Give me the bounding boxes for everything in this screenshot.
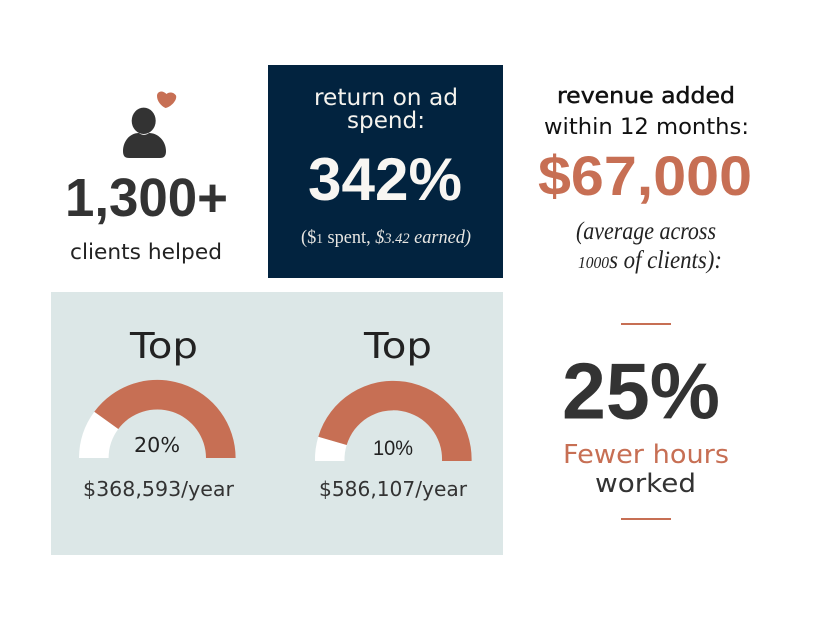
heading: return on ad spend: return on ad (314, 85, 458, 111)
gauge: top 10%: Top (363, 326, 432, 367)
panel: income gauges (51, 292, 503, 555)
gauge: top 20% (79, 326, 236, 501)
panel: revenue added: 1000s of clients): (578, 247, 722, 274)
panel: return on ad spend (268, 65, 503, 278)
gauge: top 10%: 10% (373, 437, 413, 460)
panel: revenue added: within 12 months: (544, 115, 749, 140)
panel: return on ad spend: spend: (347, 108, 425, 134)
note: average across clients: (average across (576, 218, 716, 245)
gauge: top 10%: $586,107/year (319, 477, 468, 501)
gauge: top 20%: Top (129, 326, 198, 367)
panel: revenue added (538, 84, 752, 274)
gauge: top 10% (315, 326, 472, 501)
panel: fewer hours: worked (595, 469, 696, 499)
label: fewer hours worked: Fewer hours (563, 440, 729, 470)
stat: 25%: 25% (562, 346, 720, 436)
stat: $67,000: $67,000 (538, 144, 752, 207)
stat: 1,300+: 1,300+ (65, 168, 228, 228)
panel: clients helped (65, 91, 228, 264)
panel: fewer hours (562, 323, 729, 520)
label: clients helped: clients helped (70, 240, 222, 264)
gauge: top 20%: 20% (134, 433, 180, 457)
stat: 342%: 342% (308, 146, 462, 213)
gauge: top 20%: $368,593/year (83, 477, 235, 501)
heading: revenue added: revenue added (557, 84, 735, 109)
icon: person with heart (123, 91, 176, 158)
note: spent and earned: ($1 spent, $3.42 earned) (301, 227, 471, 248)
